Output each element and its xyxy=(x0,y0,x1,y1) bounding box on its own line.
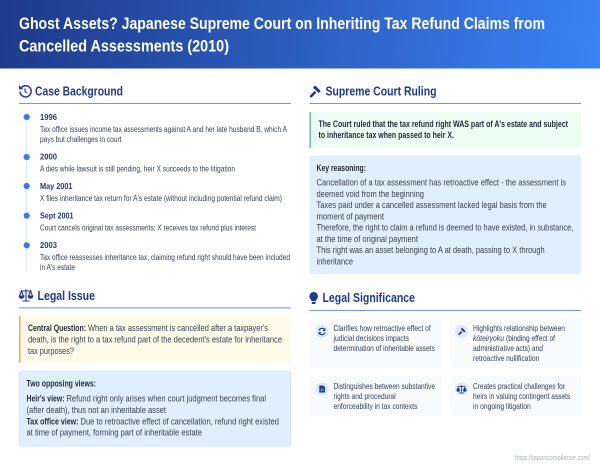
header banner xyxy=(0,0,600,68)
callout: central question xyxy=(19,316,291,363)
callout: ruling: to inheritance tax when passed to heir X. xyxy=(318,130,454,140)
icon: scales xyxy=(19,289,33,301)
card: practical challenges xyxy=(450,376,581,416)
callout: central question: When a tax assessment is cancelled after a taxpayer's xyxy=(88,323,268,333)
card: retroactive effect: judicial decisions impacts xyxy=(333,334,409,343)
callout: two opposing views: Tax office view: xyxy=(26,416,78,426)
panel: supreme court ruling xyxy=(310,84,581,274)
card: koteiryoku: administrative acts) and xyxy=(473,344,543,353)
callout: key reasoning: moment of payment xyxy=(316,211,384,221)
event: Sept 2001 xyxy=(24,211,257,232)
callout: two opposing views: Heir's view: xyxy=(26,394,64,404)
callout: two opposing views xyxy=(19,371,291,446)
event: Sept 2001: Sept 2001 xyxy=(40,211,74,221)
heading: legal significance: Legal Significance xyxy=(322,290,415,305)
icon: gavel xyxy=(310,86,321,98)
event: 2003 xyxy=(24,240,290,272)
callout: central question: death, is the right to a tax refund part of the decedent's estate for inheritance xyxy=(28,334,282,344)
event: 1996: 1996 xyxy=(40,112,57,122)
heading: case background xyxy=(19,84,291,104)
card: koteiryoku: kōteiryoku xyxy=(473,334,504,343)
panel: legal issue xyxy=(19,288,291,446)
card: practical challenges: in ongoing litigation xyxy=(473,402,531,411)
panel: legal significance xyxy=(309,290,581,416)
callout: two opposing views: (after death), thus not an inheritable asset xyxy=(26,405,166,415)
card: practical challenges: heirs in valuing contingent assets xyxy=(473,392,570,401)
callout: key reasoning: inheritance xyxy=(316,256,353,266)
card: koteiryoku xyxy=(450,319,581,368)
callout: two opposing views: Refund right only arises when court judgment becomes final xyxy=(66,394,266,404)
event: 2003: in A's estate xyxy=(40,263,75,272)
card: koteiryoku: (binding effect of xyxy=(506,334,556,343)
heading: legal significance xyxy=(309,290,581,311)
callout: central question: tax purposes? xyxy=(28,346,74,356)
card: retroactive effect xyxy=(310,319,442,368)
card: koteiryoku: Highlights relationship between xyxy=(473,324,565,333)
icon: gavel xyxy=(455,325,468,338)
card: retroactive effect: determination of inheritable assets xyxy=(334,344,435,353)
event: 2000 xyxy=(24,151,235,173)
icon: light bulb xyxy=(309,292,318,304)
event: 1996: Tax office issues income tax assessments against A and her late husband B, which A xyxy=(40,125,288,134)
callout: key reasoning xyxy=(310,156,581,274)
heading: supreme court ruling xyxy=(310,84,581,104)
event: Sept 2001: Court cancels original tax assessments; X receives tax refund plus interest xyxy=(40,224,257,232)
icon: history clock xyxy=(19,86,31,97)
timeline xyxy=(24,112,290,272)
heading: supreme court ruling: Supreme Court Ruling xyxy=(326,84,437,98)
callout: two opposing views: Due to retroactive effect of cancellation, refund right existed xyxy=(80,416,279,426)
event: May 2001: X files inheritance tax return for A's estate (without including potential refund claim) xyxy=(40,194,282,203)
card: practical challenges: Creates practical challenges for xyxy=(473,382,565,391)
event: 2003: Tax office reassesses inheritance tax, claiming refund right should have been included xyxy=(40,253,290,262)
icon: sync arrows xyxy=(316,325,328,338)
callout: key reasoning: at the time of original payment xyxy=(316,234,418,244)
panel: case background xyxy=(19,84,291,272)
callout: key reasoning: This right was an asset belonging to A at death, passing to X through xyxy=(316,245,545,255)
card: substantive rights xyxy=(310,376,442,416)
event: May 2001: May 2001 xyxy=(40,181,73,191)
event: 2000: A dies while lawsuit is still pending, heir X succeeds to the litigation xyxy=(40,164,235,173)
callout: two opposing views: Two opposing views: xyxy=(26,378,96,388)
card: retroactive effect: Clarifies how retroactive effect of xyxy=(334,324,431,333)
event: May 2001 xyxy=(24,181,282,203)
event: 2003: 2003 xyxy=(40,240,57,250)
icon: document xyxy=(316,382,328,396)
callout: two opposing views: at time of payment, forming part of inheritable estate xyxy=(26,427,202,437)
icon: scales xyxy=(455,382,468,396)
card: koteiryoku: retroactive nullification xyxy=(473,354,540,363)
card: substantive rights: enforceability in tax contexts xyxy=(334,402,417,411)
event: 1996 xyxy=(24,112,288,144)
title: Cancelled Assessments (2010) xyxy=(19,38,229,56)
callout: key reasoning: deemed void from the beginning xyxy=(316,189,424,199)
callout: ruling xyxy=(310,112,581,148)
event: 1996: pays but challenges in court xyxy=(40,135,122,144)
callout: key reasoning: Taxes paid under a cancelled assessment lacked legal basis from the xyxy=(316,200,547,210)
heading: legal issue xyxy=(19,288,291,309)
heading: legal issue: Legal Issue xyxy=(38,288,95,303)
callout: key reasoning: Key reasoning: xyxy=(316,163,366,173)
callout: central question: Central Question: xyxy=(28,323,86,333)
title xyxy=(19,15,545,56)
event: 2000: 2000 xyxy=(40,151,57,161)
heading: case background: Case Background xyxy=(35,84,123,98)
card: substantive rights: rights and procedural xyxy=(334,392,396,401)
card: substantive rights: Distinguishes between substantive xyxy=(334,382,435,391)
